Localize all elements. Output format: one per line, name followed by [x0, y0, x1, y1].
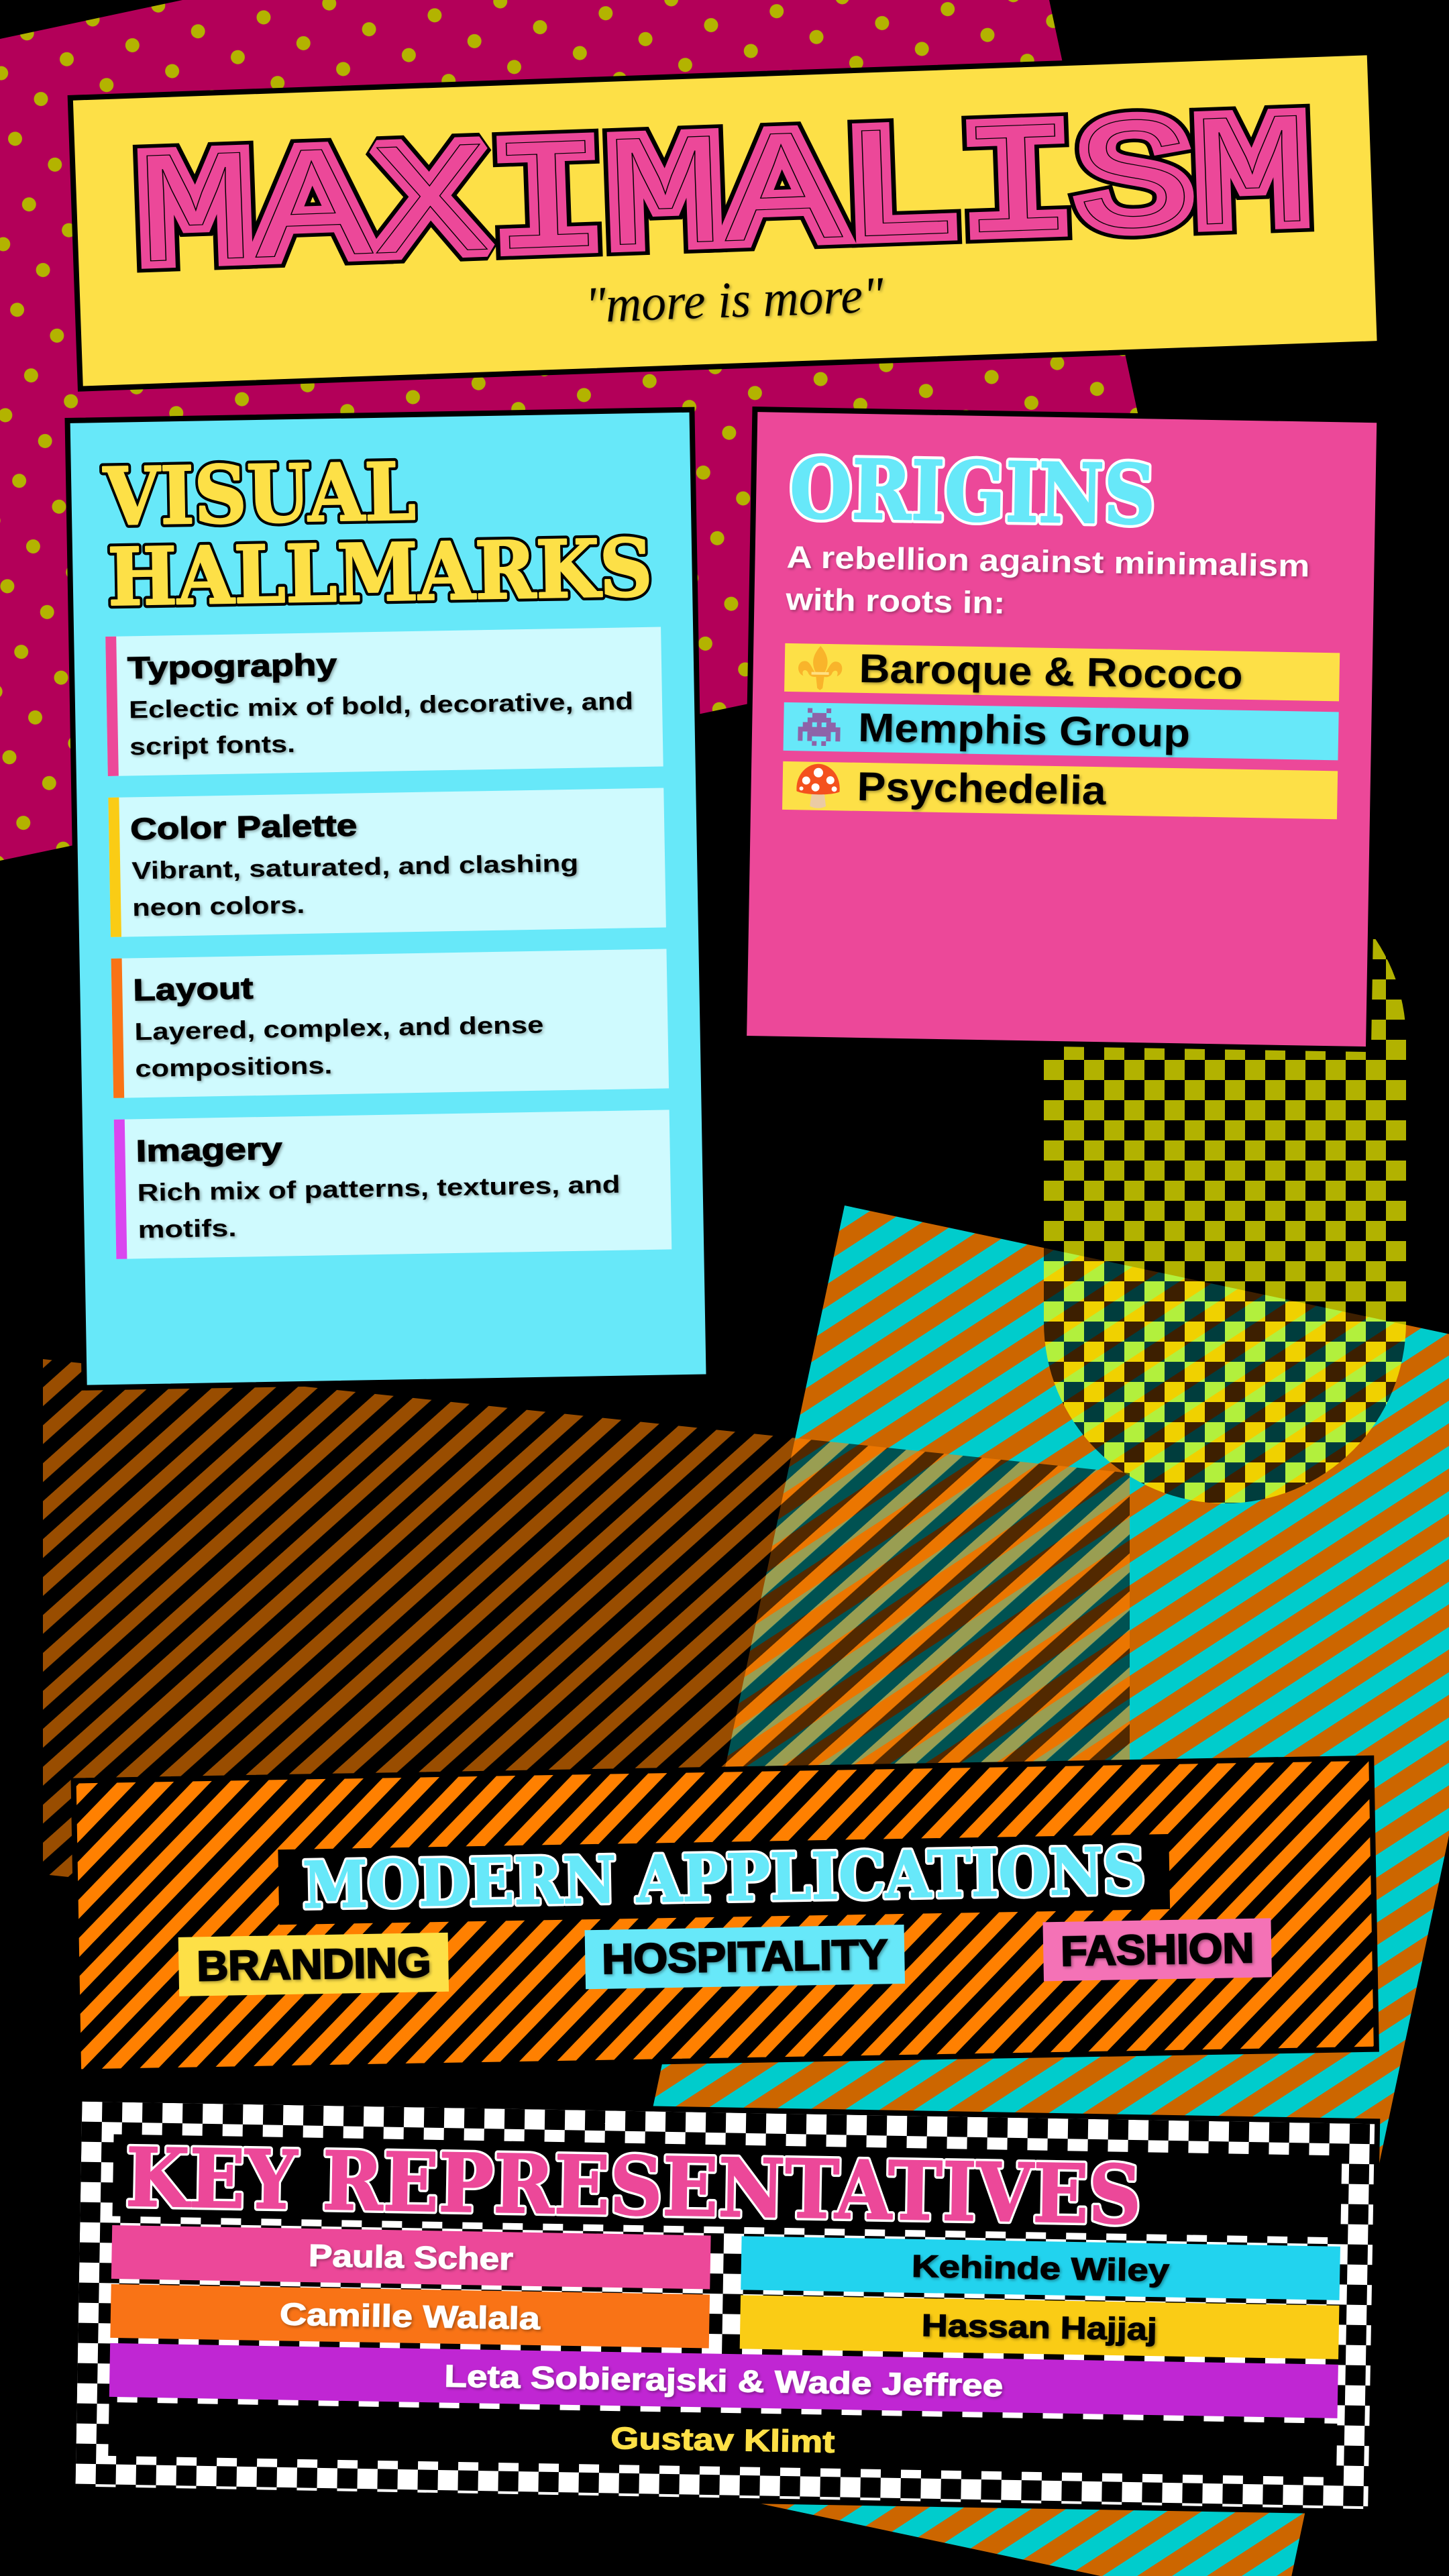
row: psychedelia [782, 761, 1338, 819]
name: leta sobierajski and wade jeffree: Leta Sobierajski & Wade Jeffree [444, 2359, 1004, 2403]
icon: fleur-de-lis [798, 645, 843, 690]
item: imagery [114, 1110, 672, 1259]
heading: key representatives: KEY REPRESENTATIVES [125, 2131, 1142, 2243]
item: layout: compositions. [135, 1051, 333, 1082]
heading: visual hallmarks: VISUAL [102, 445, 417, 543]
item: imagery: Imagery [136, 1132, 282, 1168]
row: memphis group [784, 702, 1339, 760]
item: typography [105, 627, 663, 776]
item: typography: script fonts. [129, 730, 295, 760]
tag: fashion [1042, 1918, 1272, 1981]
panel: modern applications [74, 1758, 1377, 2072]
intro text [785, 539, 1310, 626]
item: layout [111, 949, 669, 1098]
name: gustav klimt [108, 2402, 1337, 2477]
icon: space invader [798, 708, 841, 746]
name: camille walala: Camille Walala [280, 2296, 541, 2336]
heading: modern applications: MODERN APPLICATIONS [302, 1834, 1146, 1923]
tag: hospitality: HOSPITALITY [602, 1931, 888, 1983]
item: typography: Eclectic mix of bold, decorative, and [129, 687, 633, 723]
title panel background [70, 52, 1380, 389]
tag: fashion: FASHION [1061, 1925, 1254, 1975]
name: kehinde wiley: Kehinde Wiley [912, 2249, 1170, 2288]
title: MAXIMALISM: MAXIMALISM [133, 88, 1314, 309]
panel: origins [744, 409, 1379, 1049]
intro text: A rebellion against minimalism [786, 539, 1310, 584]
item: layout: Layout [133, 971, 254, 1007]
item: imagery: Rich mix of patterns, textures, and [137, 1171, 621, 1206]
heading: origins: ORIGINS [789, 440, 1157, 543]
background: yellow checkered capsule [1044, 859, 1406, 1503]
row: memphis group: Memphis Group [858, 705, 1191, 755]
name: hassan hajjaj [740, 2295, 1339, 2359]
tag: hospitality [585, 1925, 905, 1989]
name: leta sobierajski and wade jeffree [109, 2343, 1338, 2418]
checkered panel background [70, 2096, 1380, 2514]
heading: visual hallmarks: VISUAL [102, 445, 417, 543]
name: camille walala [110, 2284, 710, 2348]
panel: visual hallmarks [68, 410, 709, 1388]
heading: modern applications: MODERN APPLICATIONS [302, 1834, 1146, 1923]
origins background [744, 409, 1379, 1049]
item: imagery: motifs. [138, 1214, 237, 1243]
heading: visual hallmarks: HALLMARKS [107, 521, 653, 624]
name: gustav klimt: Gustav Klimt [610, 2420, 835, 2459]
name: paula scher [111, 2225, 711, 2290]
intro text: with roots in: [785, 582, 1006, 621]
visual hallmarks background [68, 410, 709, 1388]
heading: visual hallmarks [102, 441, 653, 624]
item: layout: Layered, complex, and dense [134, 1011, 544, 1045]
row: baroque and rococo: Baroque & Rococo [859, 646, 1243, 698]
name: kehinde wiley [741, 2236, 1340, 2300]
row: psychedelia: Psychedelia [857, 764, 1107, 813]
row: baroque and rococo [784, 643, 1340, 701]
background: crimson polka dot shape [0, 0, 1181, 861]
title: MAXIMALISM: MAXIMALISM [133, 88, 1314, 309]
background: skewed orange striped shape [43, 1359, 1130, 1988]
tag: branding [178, 1933, 449, 1996]
tag: branding: BRANDING [197, 1939, 431, 1990]
panel: key representatives [70, 2096, 1380, 2514]
icon: mushroom [796, 763, 840, 808]
item: typography: Typography [127, 647, 337, 685]
heading: visual hallmarks: HALLMARKS [107, 521, 653, 624]
name: paula scher: Paula Scher [309, 2238, 514, 2276]
item: color palette: Vibrant, saturated, and clashing [131, 849, 579, 884]
name: hassan hajjaj: Hassan Hajjaj [921, 2308, 1157, 2347]
panel: title [70, 52, 1380, 389]
item: color palette: neon colors. [132, 891, 305, 921]
heading: key representatives: KEY REPRESENTATIVES [125, 2131, 1142, 2243]
tagline: "more is more" [584, 267, 885, 333]
item: color palette [108, 788, 666, 937]
title: MAXIMALISM: MAXIMALISM [133, 88, 1314, 309]
item: color palette: Color Palette [130, 808, 358, 846]
heading: origins: ORIGINS [789, 440, 1157, 543]
modern applications striped background [74, 1758, 1377, 2072]
background: teal and orange striped shape [577, 1205, 1449, 2576]
